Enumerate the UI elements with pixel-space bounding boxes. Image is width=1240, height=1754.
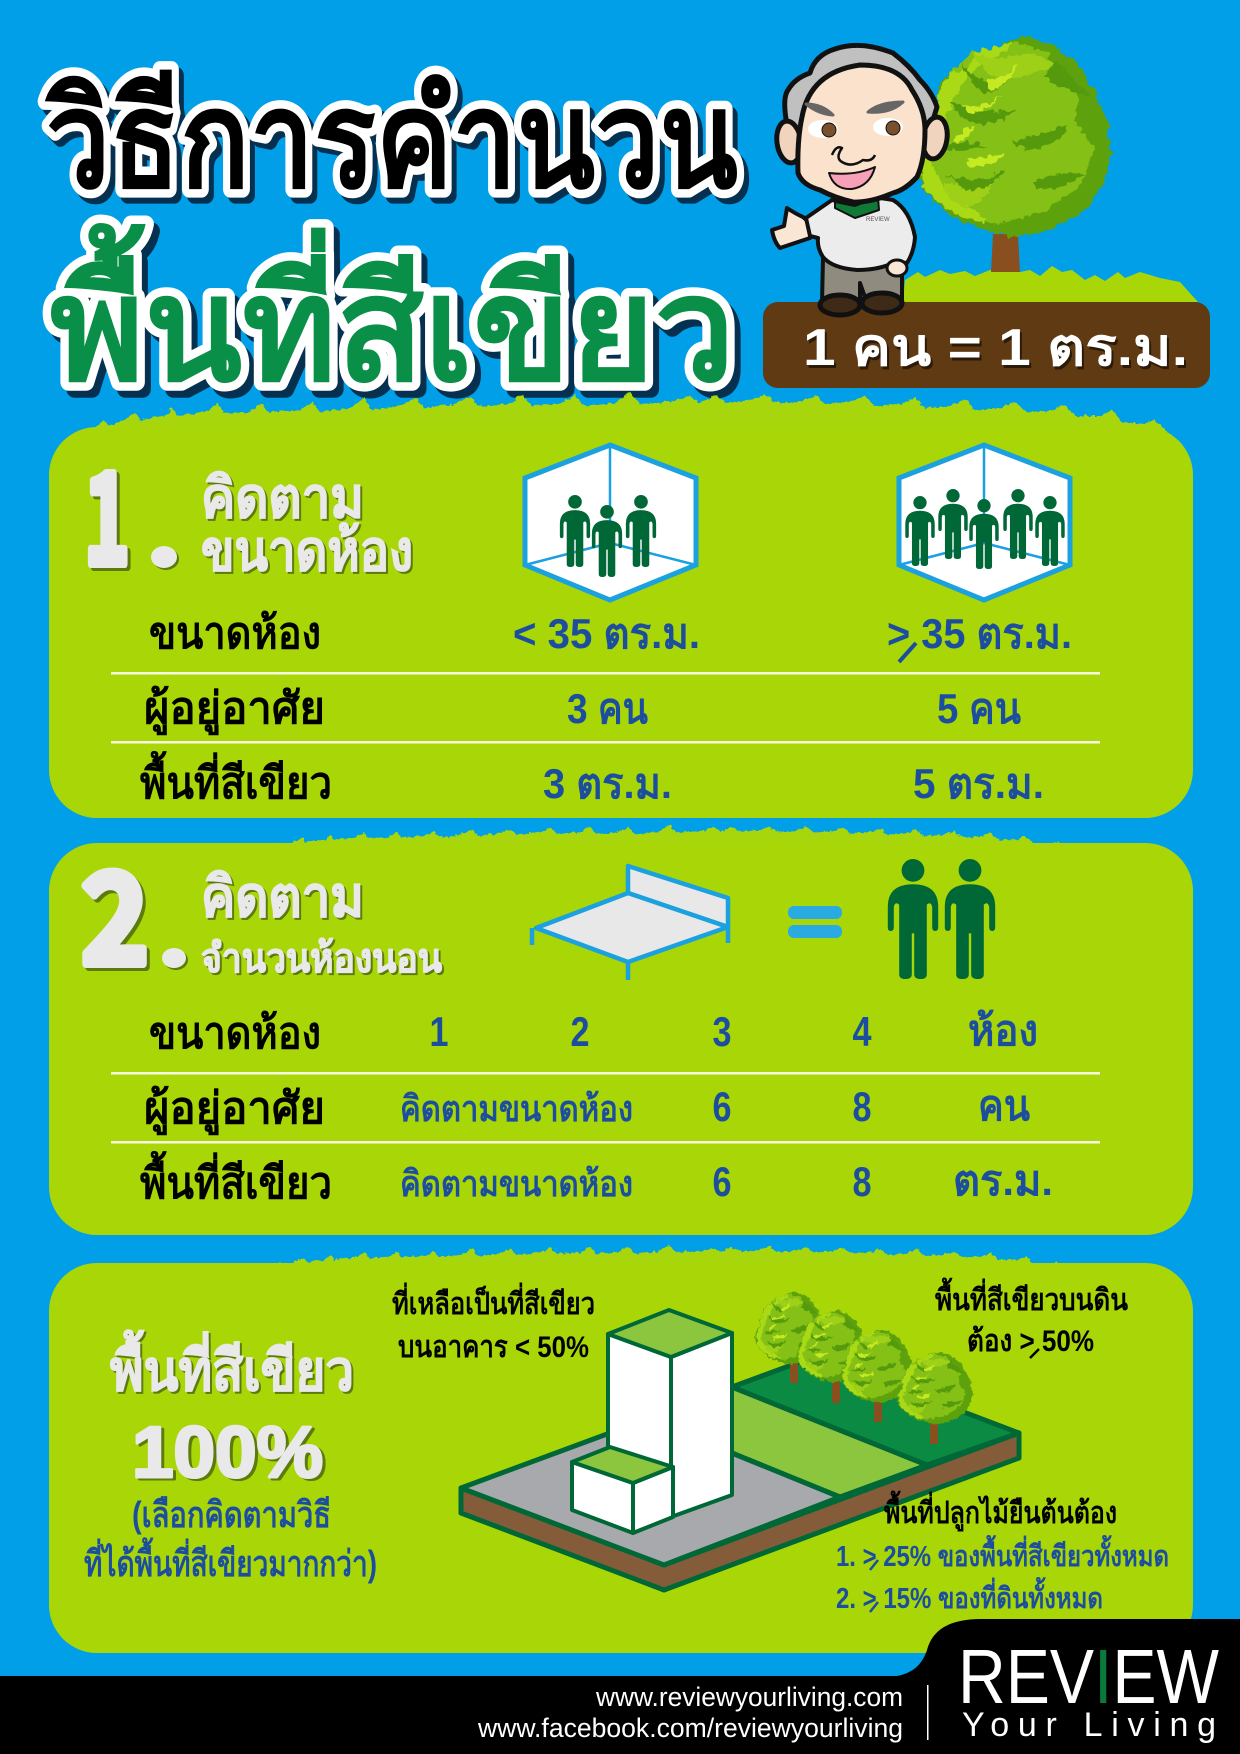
label: perennial trees: 1. > 25% ของพื้นที่สีเขียวทั้งหมด — [836, 1534, 1169, 1573]
heading: by bedroom count: จำนวนห้องนอน — [203, 939, 444, 983]
heading: by bedroom count — [201, 865, 444, 983]
table 2: 1 — [430, 1008, 448, 1055]
heading: by bedroom count: จำนวนห้องนอน — [201, 937, 442, 981]
illustration: hill — [903, 266, 1198, 302]
mascot: old man character — [772, 45, 950, 315]
table 2: 6 — [712, 1158, 732, 1205]
footer — [0, 1619, 1240, 1754]
heading: by room size — [201, 466, 415, 584]
icon: bed — [532, 866, 728, 980]
heading: by bedroom count: คิดตาม — [203, 867, 366, 930]
logo: Your Living — [962, 1706, 1216, 1744]
title: line 2: พื้นที่สีเขียว — [56, 229, 741, 418]
icon: two people — [888, 859, 995, 979]
logo: REVIEW — [958, 1634, 1219, 1720]
table 2: ขนาดห้อง — [149, 1009, 321, 1058]
table 1: 3 คน — [567, 685, 648, 732]
label: ground green area: พื้นที่สีเขียวบนดิน — [935, 1277, 1128, 1317]
table 2: 4 — [852, 1008, 872, 1055]
panel: method 1 by room size — [49, 419, 1193, 818]
trees on the ground — [755, 1292, 973, 1444]
panel: green area 100 percent — [49, 1263, 1193, 1653]
title: line 1: วิธีการคำนวน — [50, 70, 743, 222]
heading number 1: 1 — [87, 422, 133, 604]
heading: green area 100%: พื้นที่สีเขียว — [110, 1330, 354, 1402]
label: perennial trees: 2. > 15% ของที่ดินทั้งหมด — [836, 1576, 1103, 1615]
heading: green area 100%: 100% — [132, 1413, 323, 1493]
note: choose the method with more green area — [84, 1494, 377, 1584]
heading: by room size: ขนาดห้อง — [203, 521, 415, 584]
table 2: 8 — [852, 1158, 872, 1205]
table 1: พื้นที่สีเขียว — [140, 750, 332, 808]
heading: by room size: คิดตาม — [203, 468, 366, 531]
tall building — [608, 1310, 732, 1517]
label: perennial trees — [836, 1490, 1169, 1615]
table 1: ขนาดห้อง — [149, 609, 321, 658]
footer links — [477, 1682, 903, 1743]
low building — [572, 1447, 673, 1533]
table 2: ห้อง — [968, 1007, 1038, 1054]
footer links: www.facebook.com/reviewyourliving — [477, 1713, 903, 1743]
label: ground green area — [935, 1277, 1128, 1358]
table 1: ผู้อยู่อาศัย — [144, 684, 325, 735]
heading: green area 100% — [110, 1330, 356, 1495]
heading: by bedroom count: คิดตาม — [201, 865, 364, 928]
note: choose the method with more green area: ที่ได้พื้นที่สีเขียวมากกว่า) — [84, 1537, 377, 1584]
icon: equals sign — [788, 906, 842, 938]
grass above panel 2 — [247, 825, 1078, 857]
shirt logo: REVIEW — [866, 217, 890, 223]
label: roof garden — [392, 1282, 595, 1364]
icon: room with 3 people — [524, 445, 697, 601]
illustration: tree — [915, 36, 1112, 272]
heading number 2 — [81, 819, 188, 1004]
brown sign: 1 person = 1 sqm — [763, 302, 1210, 388]
table 2: 8 — [852, 1083, 872, 1130]
table 2: ผู้อยู่อาศัย — [144, 1084, 325, 1135]
footer links: www.reviewyourliving.com — [595, 1682, 903, 1712]
table 2: พื้นที่สีเขียว — [140, 1150, 332, 1208]
label: roof garden: ที่เหลือเป็นที่สีเขียว — [392, 1282, 595, 1321]
label: perennial trees: พื้นที่ปลูกไม้ยืนต้นต้อง — [884, 1490, 1117, 1532]
heading: by room size: ขนาดห้อง — [201, 519, 413, 582]
label: roof garden: บนอาคาร < 50% — [398, 1331, 589, 1364]
table 2: ตร.ม. — [953, 1157, 1053, 1204]
diagram: isometric site — [461, 1292, 1019, 1590]
panel: method 2 by bedrooms — [49, 819, 1193, 1235]
table 2: 6 — [712, 1083, 732, 1130]
label: ground green area: ต้อง > 50% — [967, 1325, 1094, 1358]
table 2: 2 — [570, 1008, 590, 1055]
icon: room with 5 people — [898, 445, 1071, 601]
table 1: 5 ตร.ม. — [913, 760, 1044, 807]
heading: green area 100%: 100% — [135, 1415, 326, 1495]
table 2: คิดตามขนาดห้อง — [400, 1163, 633, 1204]
heading: green area 100%: พื้นที่สีเขียว — [112, 1332, 356, 1404]
heading number 2: 2 — [84, 822, 152, 1004]
grass above panel 1 — [60, 392, 1182, 445]
heading number 1: 1 — [84, 419, 130, 601]
table 2: คน — [978, 1082, 1030, 1129]
table 1: > 35 ตร.ม. — [887, 610, 1072, 657]
note: choose the method with more green area: (เลือกคิดตามวิธี — [132, 1494, 331, 1535]
grass above panel 3 — [247, 1245, 1078, 1277]
brown sign: 1 person = 1 sqm: 1 คน = 1 ตร.ม. — [805, 322, 1190, 380]
title: line 2: พื้นที่สีเขียว — [50, 222, 735, 411]
table 1 — [111, 609, 1100, 808]
heading number 2: 2 — [81, 819, 149, 1001]
table 2 — [111, 1007, 1100, 1208]
table 1: 3 ตร.ม. — [543, 760, 672, 807]
title: line 1: วิธีการคำนวน — [45, 64, 738, 216]
table 2: คิดตามขนาดห้อง — [400, 1088, 633, 1129]
brown sign: 1 person = 1 sqm: 1 คน = 1 ตร.ม. — [803, 319, 1188, 377]
heading: by room size: คิดตาม — [201, 466, 364, 529]
table 1: 5 คน — [937, 685, 1021, 732]
table 1: < 35 ตร.ม. — [513, 610, 700, 657]
table 2: 3 — [712, 1008, 732, 1055]
